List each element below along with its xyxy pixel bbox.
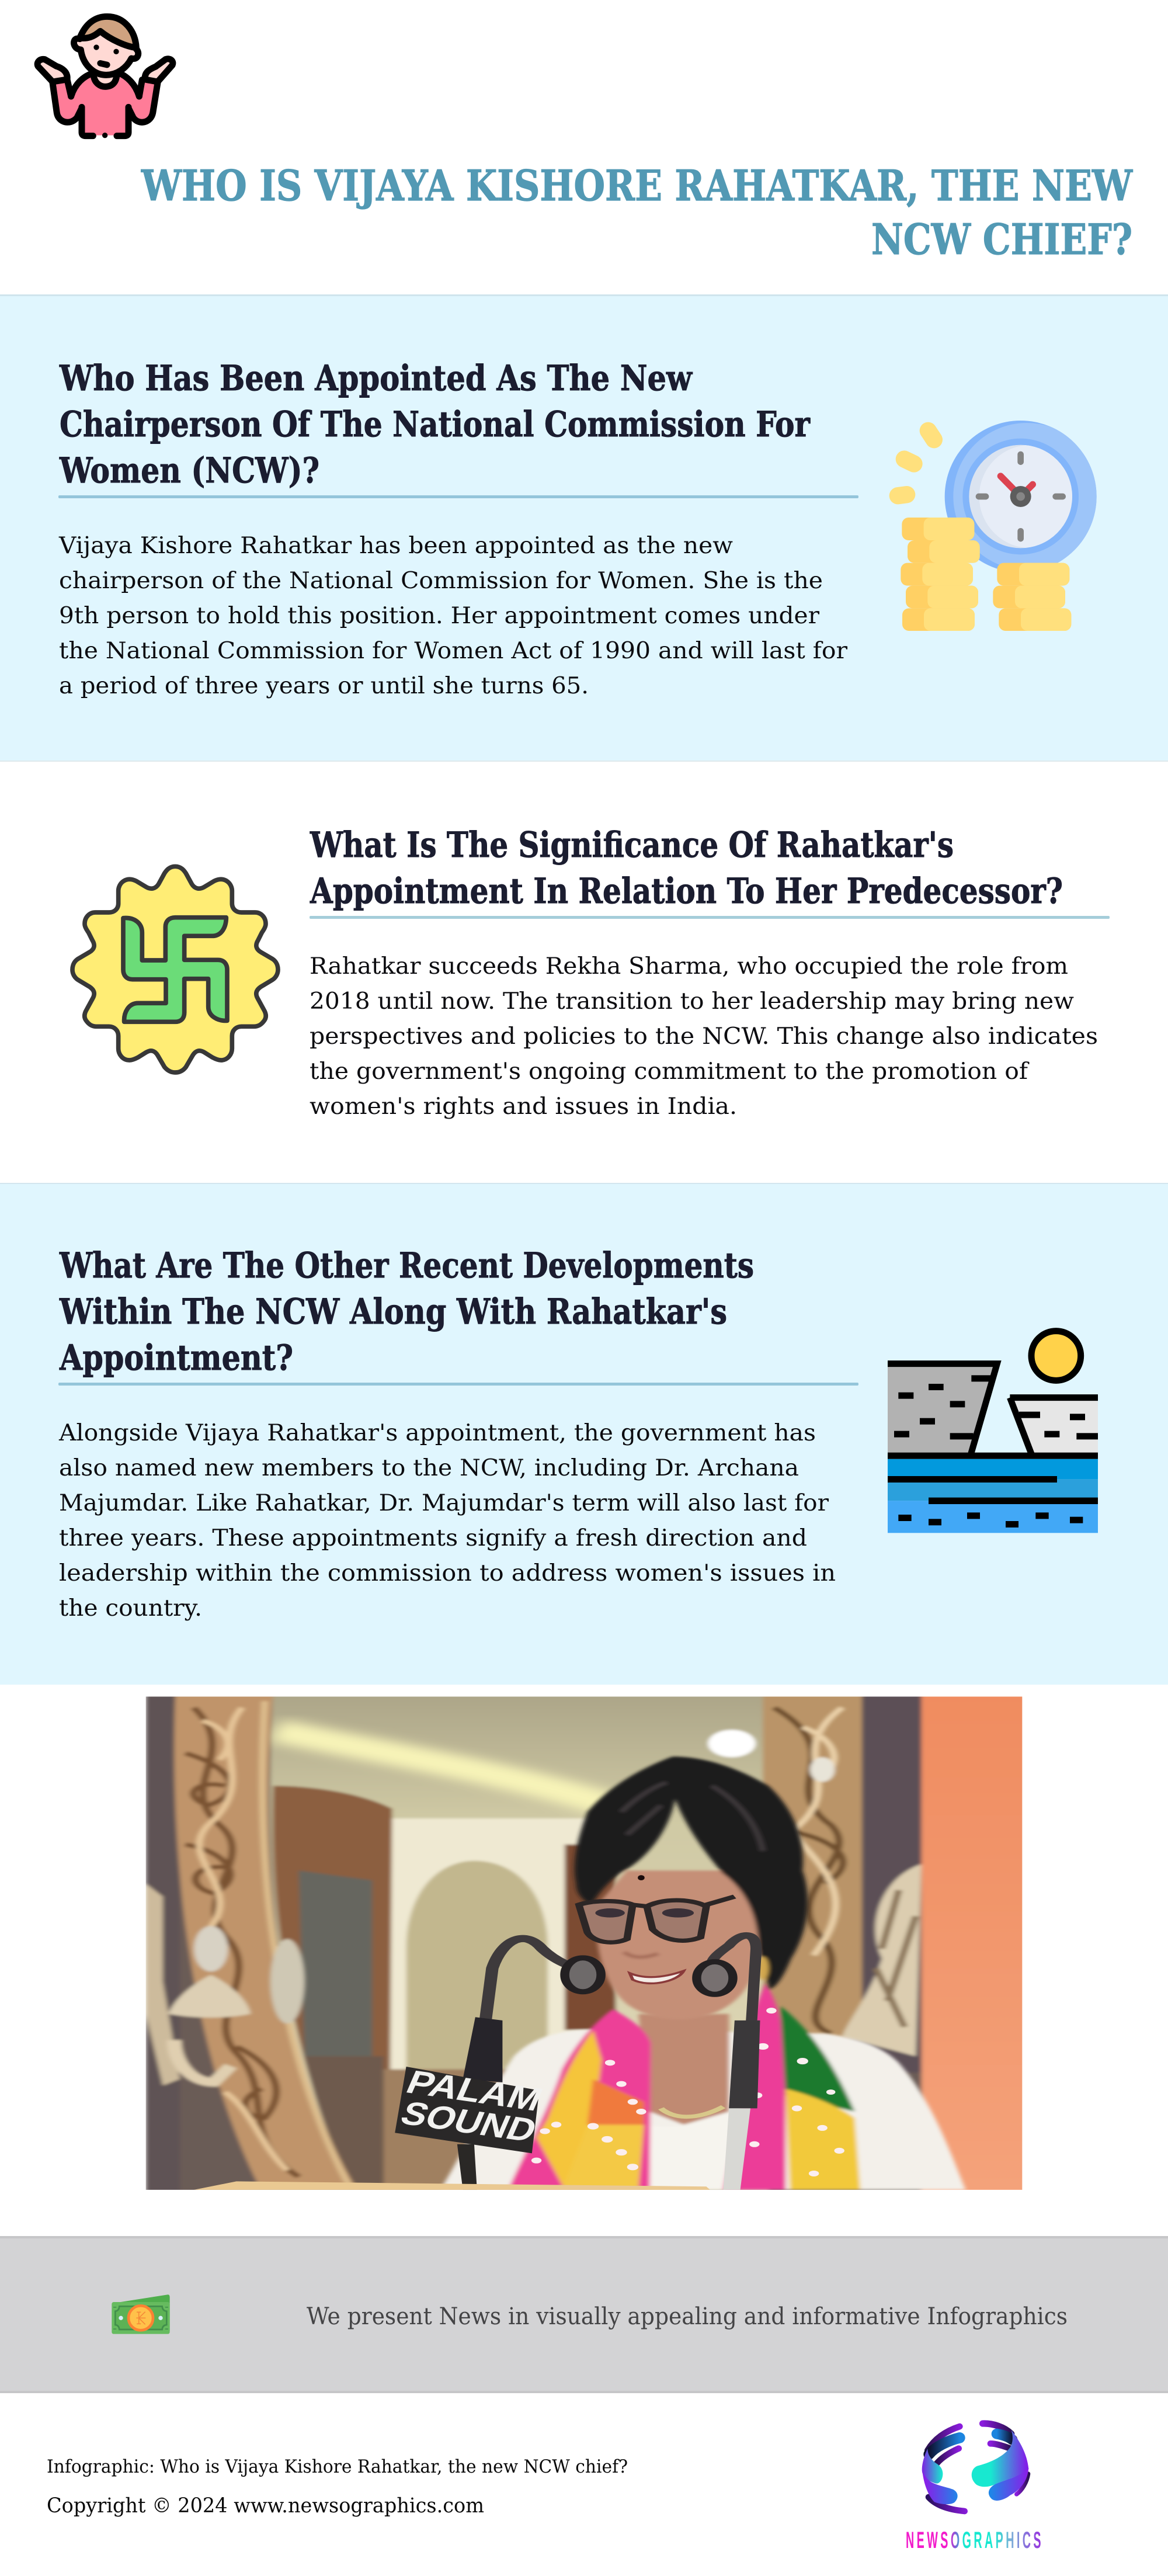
heading: section 1: Women (NCW)? (59, 450, 319, 491)
heading: section 3: Appointment? (59, 1338, 293, 1379)
mouth (630, 1971, 684, 1983)
carved mirror frame left (146, 1695, 180, 2193)
microphone sign: PALAM (401, 2063, 548, 2118)
heading: section 3: Within The NCW Along With Rahatkar's (59, 1292, 727, 1332)
panel: who has been appointed (0, 294, 1168, 761)
title (141, 161, 1133, 264)
scarf tie-dye dots (531, 2008, 844, 2176)
mirror interior (270, 1695, 769, 2190)
microphones (485, 1935, 756, 2020)
ornament left (168, 1975, 251, 2018)
necklace (661, 2107, 723, 2117)
body text: section 2: 2018 until now. The transition to her leadership may bring new (310, 988, 1074, 1015)
body text: section 1: the National Commission for Women Act of 1990 and will last for (59, 638, 847, 664)
body text: section 1: Vijaya Kishore Rahatkar has been appointed as the new (58, 533, 733, 559)
icon: swastika badge (72, 866, 278, 1072)
header panel (0, 0, 1168, 294)
icon: cliffs, sun and water (888, 1331, 1098, 1533)
panel: tagline band (0, 2236, 1168, 2393)
body text: section 3: the country. (59, 1595, 202, 1622)
microphone sign: SOUND (395, 2094, 543, 2149)
hair (575, 1756, 808, 1990)
white kurta (440, 2029, 965, 2190)
heading: section 1: Chairperson Of The National Commission For (60, 404, 811, 445)
body text: section 2: women's rights and issues in India. (310, 1093, 737, 1120)
body text: section 2: the government's ongoing commitment to the promotion of (310, 1058, 1030, 1085)
heading: section 2 (310, 825, 1063, 912)
icon: clock and coins (898, 421, 1100, 631)
heading: section 3 (59, 1245, 754, 1379)
panel: other recent developments (0, 1183, 1168, 1685)
body text: section 3: Alongside Vijaya Rahatkar's appointment, the government has (58, 1420, 816, 1446)
body text: section 3 (58, 1420, 836, 1622)
body text: section 1: 9th person to hold this position. Her appointment comes under (59, 603, 819, 629)
body text: section 3: three years. These appointments signify a fresh direction and (59, 1525, 807, 1551)
body text: section 3: also named new members to the NCW, including Dr. Archana (59, 1455, 799, 1481)
body text: section 1: a period of three years or until she turns 65. (59, 673, 589, 699)
tagline text: We present News in visually appealing and informative Infographics (307, 2303, 1068, 2330)
body text: section 2: perspectives and policies to the NCW. This change also indicates (310, 1023, 1098, 1050)
heading: section 3: What Are The Other Recent Developments (59, 1245, 754, 1286)
photo: Vijaya Rahatkar speaking at microphones (146, 1695, 1029, 2193)
body text: section 2: Rahatkar succeeds Rekha Sharma, who occupied the role from (310, 953, 1068, 980)
icon: shrugging person (37, 16, 173, 138)
desk edge (194, 2181, 712, 2192)
body text: section 1 (58, 533, 847, 699)
footer credits: Infographic: Who is Vijaya Kishore Rahatkar, the new NCW chief? (47, 2456, 628, 2477)
body text: section 1: chairperson of the National Commission for Women. She is the (59, 568, 823, 594)
microphone sign (395, 2063, 548, 2153)
glasses (579, 1897, 735, 1942)
footer credits (47, 2456, 628, 2518)
heading: section 1: Who Has Been Appointed As The New (59, 358, 693, 399)
orange wall (922, 1695, 1029, 2193)
neck (638, 2014, 729, 2124)
carved mirror frame right (763, 1695, 865, 2040)
panel: significance of appointment (0, 761, 1168, 1183)
logo: Newsographics (906, 2424, 1044, 2553)
scarf left (508, 2009, 651, 2190)
body text: section 3: leadership within the commission to address women's issues in (59, 1560, 836, 1586)
body text: section 2 (310, 953, 1098, 1120)
blouse (649, 2112, 729, 2190)
face (597, 1870, 760, 2019)
footer credits: Copyright © 2024 www.newsographics.com (47, 2494, 484, 2518)
heading: section 2: What Is The Significance Of Rahatkar's (310, 825, 954, 866)
heading: section 1 (59, 358, 811, 491)
icon: banknote (112, 2294, 170, 2334)
scarf right (723, 1983, 785, 2190)
body text: section 3: Majumdar. Like Rahatkar, Dr. Majumdar's term will also last for (59, 1490, 829, 1516)
